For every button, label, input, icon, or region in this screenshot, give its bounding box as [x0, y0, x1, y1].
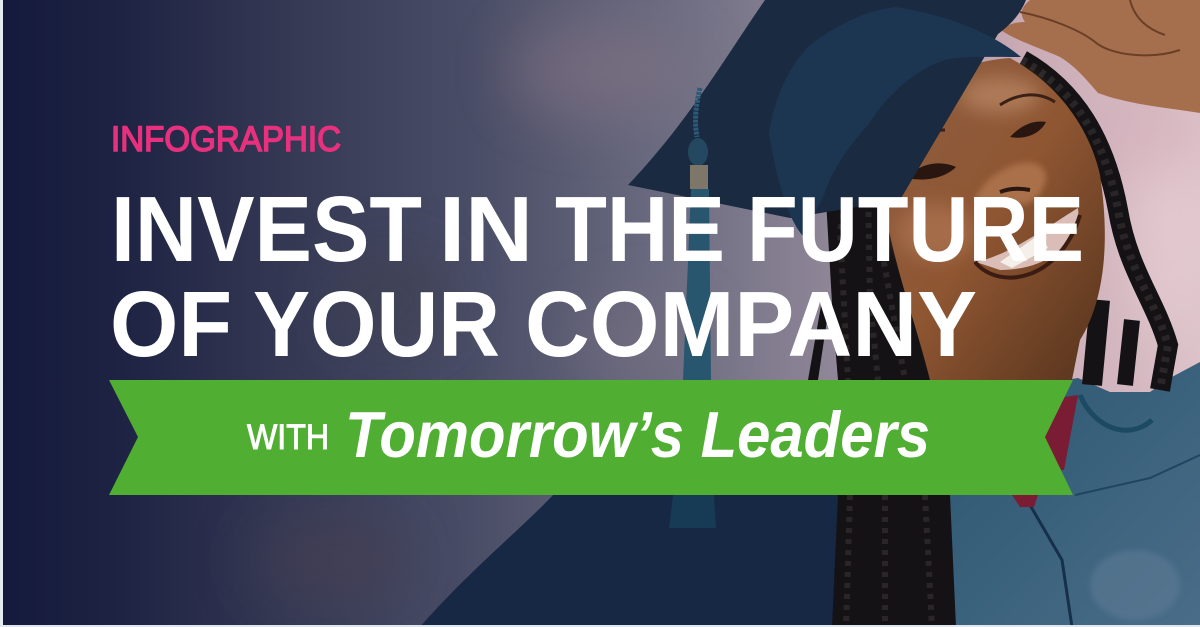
ribbon text: with: WITH: [247, 418, 329, 457]
mortarboard cap: [628, 0, 1026, 218]
bottom edge stripe: [0, 625, 1200, 627]
headline: FUTURE: [747, 177, 1084, 281]
headline: IN: [439, 177, 533, 281]
green ribbon: [109, 380, 1073, 495]
facial features: [885, 77, 1080, 278]
right braids: [1022, 60, 1168, 390]
eyebrow label: INFOGRAPHIC: [111, 120, 341, 159]
headline: COMPANY: [525, 272, 977, 376]
headline: THE: [555, 177, 725, 281]
hand: [1002, 0, 1200, 113]
tassel: [669, 88, 716, 528]
headline: [110, 177, 1084, 376]
left edge stripe: [0, 0, 3, 627]
photo: graduate: [420, 0, 1200, 627]
cap band: [769, 7, 1021, 236]
face: [875, 58, 1105, 380]
gown: [420, 362, 1200, 627]
headline: YOUR: [253, 272, 500, 376]
left braids: [808, 122, 956, 627]
blurred blossom background: [250, 20, 1200, 610]
headline: INVEST: [111, 177, 422, 281]
ribbon text: Tomorrow's Leaders: Tomorrow’s Leaders: [345, 398, 930, 471]
headline: OF: [110, 272, 232, 376]
